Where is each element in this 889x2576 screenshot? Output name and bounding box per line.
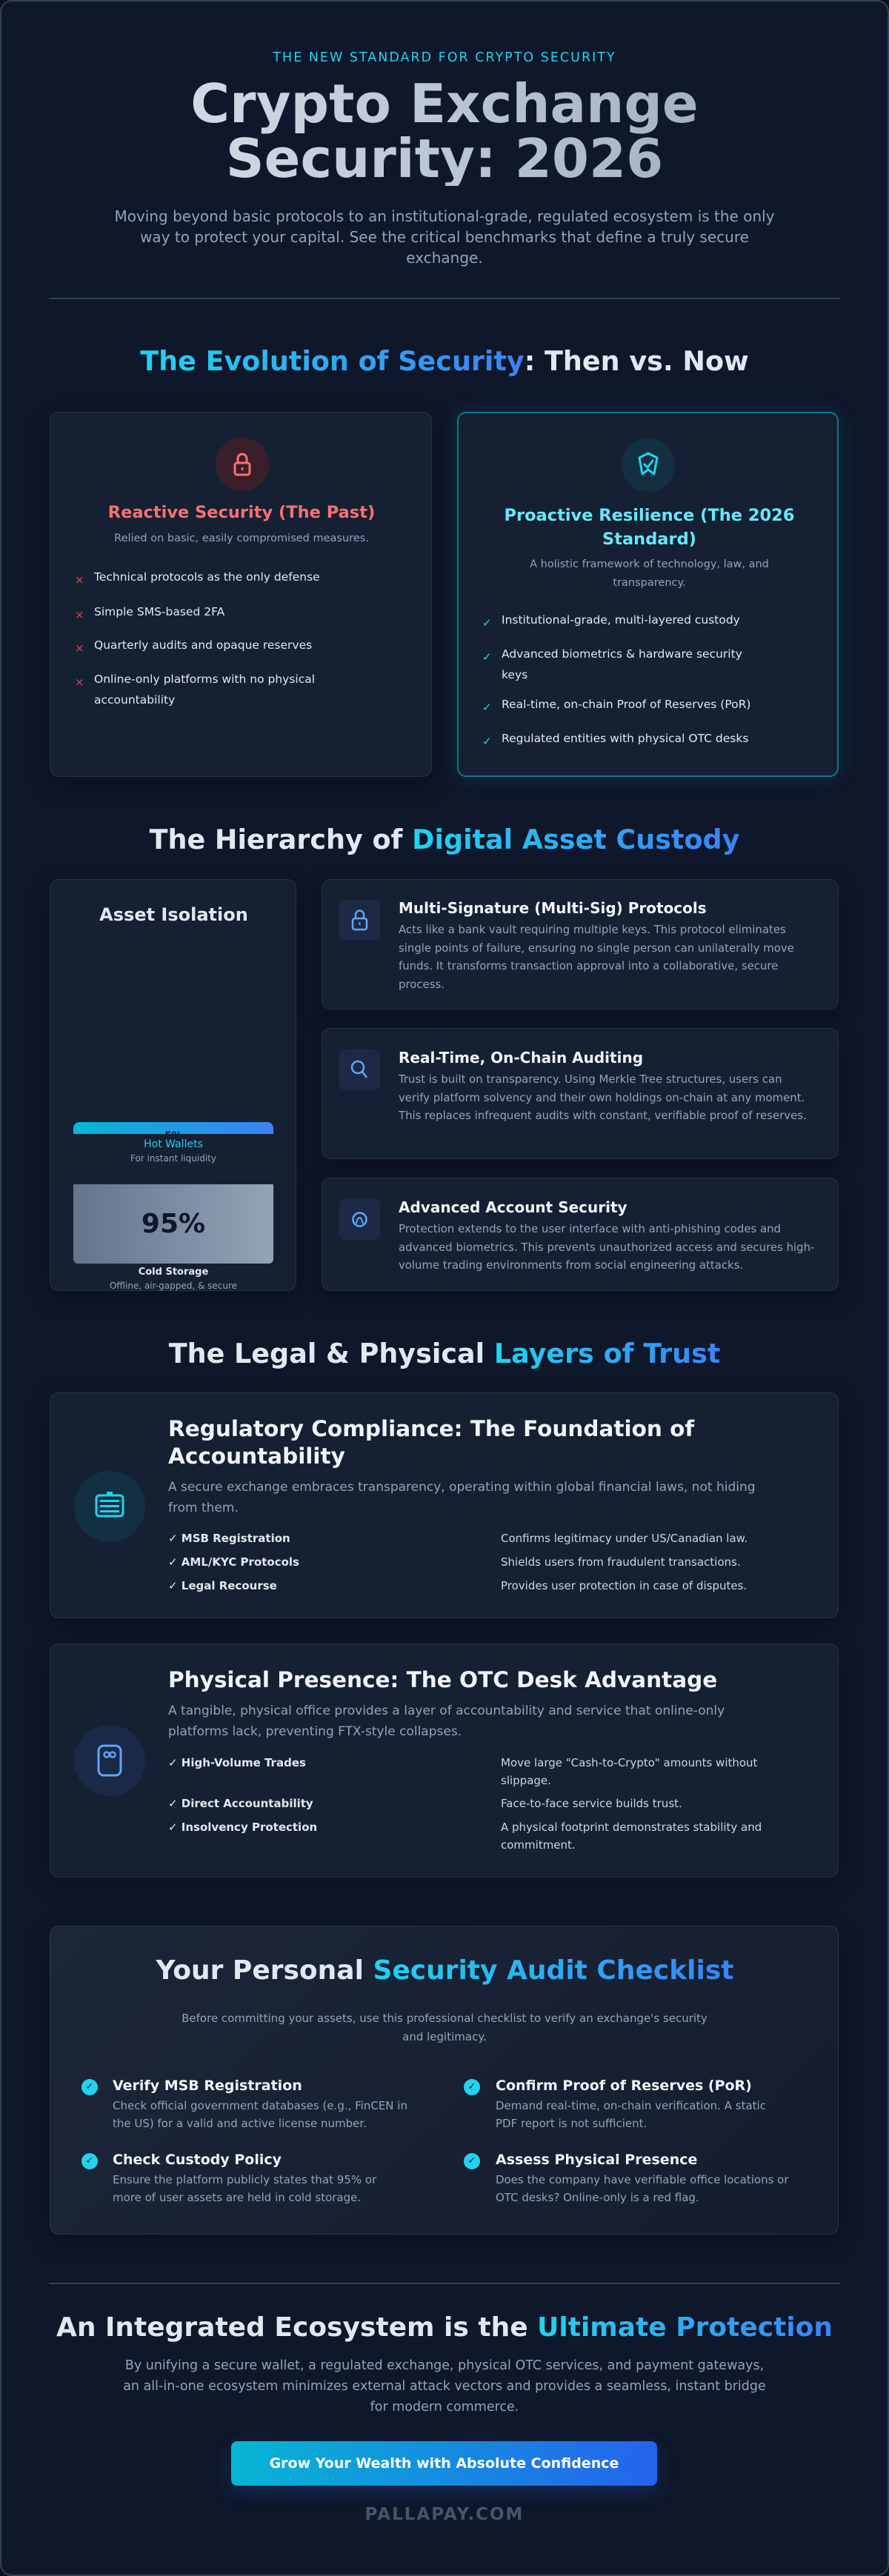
panel: physical presence [50, 1644, 839, 1878]
text: Acts like a bank vault requiring multiple keys. This protocol eliminates single points of failure, ensuring no single person can unilaterally move funds. It transforms transaction approval into a collaborative, secure process. [399, 923, 794, 991]
item: custody: Check Custody Policy [113, 2152, 282, 2168]
heading: evolution: The Evolution of Security: Then vs. Now [140, 345, 749, 377]
bar: cold storage: 95% [141, 1209, 205, 1239]
heading: integrated ecosystem: An Integrated Ecosystem is the Ultimate Protection [56, 2312, 833, 2343]
icon: shield [622, 438, 675, 492]
item: PoR: Demand real-time, on-chain verification. A static PDF report is not sufficient. [496, 2099, 766, 2130]
panel: checklist [50, 1926, 839, 2235]
list: now: Regulated entities with physical OTC desks [502, 732, 748, 745]
subtitle: Before committing your assets, use this professional checklist to verify an exchange's security and legitimacy. [182, 2012, 707, 2043]
title: Crypto Exchange [190, 73, 699, 135]
list: A physical footprint demonstrates stability and commitment. [501, 1821, 762, 1852]
panel: reactive security: × [75, 573, 84, 587]
panel: reactive security [50, 412, 432, 777]
text [399, 1198, 814, 1272]
button: CTA: Grow Your Wealth with Absolute Confidence [270, 2455, 619, 2472]
panel: regulatory compliance [50, 1392, 839, 1618]
list: Move large "Cash-to-Crypto" amounts without slippage. [501, 1756, 757, 1787]
text: Trust is built on transparency. Using Merkle Tree structures, users can verify platform solvency and their own holdings on-chain at any moment. This replaces infrequent audits with constant, verifiable proof of reserves. [399, 1072, 807, 1122]
item: PoR: ✓ [468, 2081, 476, 2092]
panel: multi-sig [322, 879, 839, 1010]
panel: reactive security: × [75, 641, 84, 655]
item: MSB: ✓ [86, 2081, 93, 2092]
list: Provides user protection in case of disputes. [501, 1579, 747, 1592]
panel: proactive resilience: ✓ [482, 701, 492, 714]
icon: fingerprint [339, 1199, 380, 1240]
title: Physical Presence: The OTC Desk Advantage [168, 1667, 717, 1692]
item: physical [464, 2152, 789, 2204]
bar: cold storage: Cold Storage [139, 1267, 208, 1278]
tagline: THE NEW STANDARD FOR CRYPTO SECURITY [273, 50, 616, 65]
list: Face-to-face service builds trust. [501, 1797, 682, 1810]
item: physical: Assess Physical Presence [496, 2152, 697, 2168]
panel: asset isolation [50, 879, 296, 1291]
text: Multi-Signature (Multi-Sig) Protocols [399, 899, 707, 917]
footer brand: PALLAPAY.COM [365, 2505, 524, 2524]
heading: Your Personal Security Audit Checklist [156, 1955, 733, 1986]
text: Protection extends to the user interface with anti-phishing codes and advanced biometrics. This prevents unauthorized access and secures high-volume trading environments from social engineering attacks. [399, 1222, 814, 1272]
list [168, 1532, 748, 1592]
bar: cold storage: Offline, air-gapped, & secure [110, 1281, 237, 1291]
list: ✓ High-Volume Trades [168, 1756, 306, 1769]
list: ✓ MSB Registration [168, 1532, 290, 1545]
list: Shields users from fraudulent transactions. [501, 1555, 741, 1569]
item: MSB [81, 2078, 407, 2130]
list: ✓ Insolvency Protection [168, 1821, 317, 1834]
bar: cold storage [73, 1184, 273, 1291]
title [0, 76, 889, 186]
list: past: Quarterly audits and opaque reserves [94, 638, 312, 652]
closing text: By unifying a secure wallet, a regulated exchange, physical OTC services, and payment gateways, an all-in-one ecosystem minimizes external attack vectors and provides a seamless, instant bridge for modern commerce. [123, 2358, 766, 2415]
item: PoR: Confirm Proof of Reserves (PoR) [496, 2078, 752, 2094]
panel: reactive security: × [75, 675, 84, 689]
heading: hierarchy: The Hierarchy of Digital Asset Custody [150, 824, 739, 855]
text: Advanced Account Security [399, 1198, 627, 1216]
heading: legal & physical: The Legal & Physical Layers of Trust [169, 1338, 720, 1369]
list [168, 1756, 762, 1852]
item: custody [81, 2152, 376, 2204]
card subtitle: Relied on basic, easily compromised measures. [114, 533, 369, 544]
button: CTA [231, 2441, 657, 2486]
card subtitle: A holistic framework of technology, law, and transparency. [530, 558, 769, 589]
icon: building [74, 1471, 145, 1542]
list: now [482, 613, 750, 748]
bar: hot wallets [73, 1122, 273, 1164]
list: past: Technical protocols as the only defense [94, 570, 320, 584]
item: custody: Ensure the platform publicly states that 95% or more of user assets are held in cold storage. [113, 2173, 376, 2204]
list: past: Online-only platforms with no physical accountability [94, 673, 315, 707]
bar: hot wallets: For instant liquidity [130, 1153, 216, 1164]
list: now: Institutional-grade, multi-layered custody [502, 613, 740, 627]
panel: proactive resilience: ✓ [482, 616, 492, 630]
list: ✓ Direct Accountability [168, 1797, 313, 1810]
item: physical: ✓ [468, 2155, 476, 2166]
panel: on-chain auditing [322, 1028, 839, 1159]
card title: Reactive Security (The Past) [108, 503, 375, 522]
list: now: Real-time, on-chain Proof of Reserves (PoR) [502, 698, 750, 711]
panel: account security [322, 1178, 839, 1291]
description: A tangible, physical office provides a layer of accountability and service that online-only platforms lack, preventing FTX-style collapses. [168, 1704, 725, 1739]
list: past [75, 570, 320, 707]
item: PoR [464, 2078, 766, 2130]
title: Security: 2026 [226, 127, 663, 190]
list: now: Advanced biometrics & hardware security keys [502, 647, 742, 681]
text: Real-Time, On-Chain Auditing [399, 1049, 643, 1067]
text [399, 1049, 807, 1122]
description: A secure exchange embraces transparency, operating within global financial laws, not hiding from them. [168, 1480, 756, 1515]
panel: reactive security: × [75, 608, 84, 621]
bar: hot wallets: Hot Wallets [144, 1138, 203, 1150]
list: ✓ AML/KYC Protocols [168, 1555, 299, 1569]
item: MSB: Verify MSB Registration [113, 2078, 302, 2094]
list: ✓ Legal Recourse [168, 1579, 277, 1592]
list: Confirms legitimacy under US/Canadian law. [501, 1532, 748, 1545]
item: custody: ✓ [86, 2155, 93, 2166]
list: past: Simple SMS-based 2FA [94, 605, 224, 618]
panel title: Asset Isolation [99, 904, 248, 925]
title: Regulatory Compliance: The Foundation of Accountability [168, 1416, 694, 1469]
icon: lock [339, 900, 380, 941]
panel: proactive resilience: ✓ [482, 650, 492, 664]
intro text: Moving beyond basic protocols to an institutional-grade, regulated ecosystem is the only way to protect your capital. See the critical benchmarks that define a truly secure exchange. [114, 207, 775, 267]
icon: lock [216, 438, 269, 491]
item: physical: Does the company have verifiable office locations or OTC desks? Online-only is a red flag. [496, 2173, 789, 2204]
item: MSB: Check official government databases (e.g., FinCEN in the US) for a valid and active license number. [113, 2099, 407, 2130]
panel: proactive resilience: ✓ [482, 735, 492, 748]
card title: Proactive Resilience (The 2026 Standard) [504, 506, 794, 549]
icon: magnifier [339, 1050, 380, 1090]
panel: proactive resilience [457, 412, 839, 777]
icon: device [74, 1725, 145, 1796]
